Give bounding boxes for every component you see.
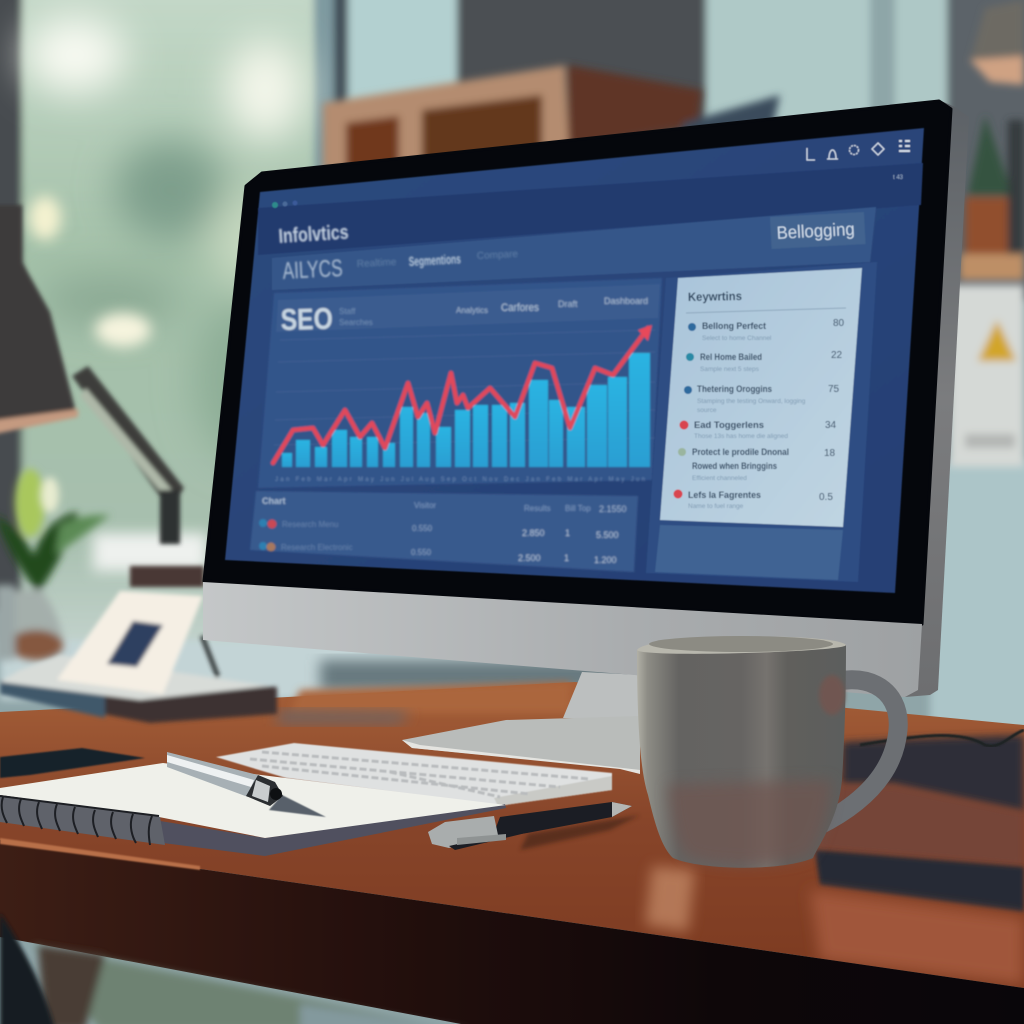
heading: Infolytics: Infolvtics [278,222,349,248]
monitor right side edge [905,100,969,697]
keyword row 5: Protect le prodile Dnonal [692,447,789,458]
keyword row 4: Ead Toggerlens [694,420,764,431]
keyword row 6: Name to fuel range [688,503,744,510]
keyword row 1: 80 [833,318,845,329]
mug lower warm tint [668,780,832,865]
chart panel: Searches [339,318,373,327]
lit wood foreground right [810,890,1024,985]
red trend line with arrow [273,325,652,463]
keyword row 4 [680,420,837,440]
mug reflection [645,866,695,932]
mug handle joint [819,675,845,715]
bottom data table: Research Menu [282,520,338,529]
bottom data table: 2.500 [518,553,541,563]
keywords panel: Keywrtins [688,289,742,304]
bar chart [282,353,650,467]
bottom data table: 0.550 [412,524,433,533]
bottom data table [250,491,638,572]
keyword row 5: Rowed when Bringgins [692,461,777,472]
keyword row 2: 22 [831,350,843,361]
smartphone on desk [0,748,145,778]
pen shadow [269,795,326,817]
chart panel: Carfores [501,302,539,314]
keyboard [216,743,612,806]
chart panel: Staff [339,307,356,316]
bottom data table: Visitor [414,501,436,510]
keyword row 1 [688,318,845,342]
toolbar icons [807,141,910,160]
long shadow band [815,850,1024,912]
bottom data table: 2.1550 [599,504,627,514]
bottom data table: 0.550 [411,548,432,557]
bottom data table: Research Electronic [281,543,353,552]
monitor bezel [204,101,951,624]
mug handle [818,680,898,826]
bottom data table: Chart [262,496,286,506]
navigation bar: Segmentions [408,251,461,269]
monitor stand [402,672,640,774]
navigation bar: Compare [477,249,519,262]
desk surface [0,682,1024,988]
bottom data table: 5.500 [596,530,619,540]
bottom data table: 1.200 [594,555,617,565]
mug rim [637,636,846,654]
dark band under toolbar [258,163,923,255]
keyword row 5: Efficient channeled [692,475,747,482]
chart axis labels: Jan Feb Mar Apr May Jun Jul Aug Sep Oct Nov Dec Jan Feb Mar Apr May Jun [275,477,645,483]
bottom data table: Bill Top [565,504,591,513]
navigation bar: AILYCS [282,255,343,285]
navigation bar: Bellogging [776,219,855,243]
desk front edge [0,838,1024,1024]
shadow area right of mug [842,735,1024,812]
monitor [203,100,969,697]
black pen on desk [428,802,640,850]
chart panel: Dashboard [604,296,648,306]
chart panel: SEO [280,303,333,337]
navigation bar [272,207,876,290]
keyword row 6 [674,490,833,510]
spiral notebook [0,763,506,856]
potted plant on the left [0,469,110,660]
keyword row 3: Thetering Oroggins [697,384,772,395]
right background: lamp, plant, shelf and sign [950,0,1024,467]
empty lower box [655,525,843,580]
wood grain strip right of mug [815,785,1024,867]
silver pen on notebook [167,752,283,806]
window controls [272,200,298,208]
bottom data table: Results [524,504,551,513]
chart panel: Analytics [456,306,488,315]
keyword row 3: 75 [828,384,840,395]
keywords panel [660,268,862,527]
keyword row 2: Rel Home Bailed [700,352,762,363]
keyword row 6: Lefs la Fagrentes [688,490,761,501]
wooden shelf behind monitor [323,65,780,170]
spiral binding [0,795,165,845]
bottom data table: 1 [564,553,569,563]
bottom data table: 2.850 [522,528,545,538]
keyword row 2: Sample next 5 steps [700,366,760,373]
keyword row 3 [684,384,840,414]
right column background [646,262,877,582]
keyword row 3: Stamping the testing Onward, logging [697,398,806,405]
keyword row 3: source [697,407,717,414]
keyword row 1: Bellong Perfect [702,321,767,332]
keyword row 5 [678,447,836,482]
coffee mug [637,636,898,868]
cable behind mug [860,730,1024,746]
picture frame and book stack [0,591,277,723]
chart panel [258,278,662,488]
keyword row 6: 0.5 [819,492,833,503]
desk lamp on the left [0,205,204,587]
screen: SEO dashboard [225,128,924,593]
space under the desk [33,945,470,1024]
bottom data table: 1 [565,528,570,538]
mug body [637,645,846,868]
monitor chin [203,582,922,697]
small status text: t 43 [893,175,904,181]
chart panel: Draft [558,299,578,309]
navigation bar: Realtime [357,257,397,270]
keyword row 2 [686,350,843,373]
keyword row 4: Those 13s has home die aligned [694,433,788,440]
keyword row 4: 34 [825,420,837,431]
keyword row 1: Select to home Channel [702,335,772,342]
keyword row 5: 18 [824,448,836,459]
